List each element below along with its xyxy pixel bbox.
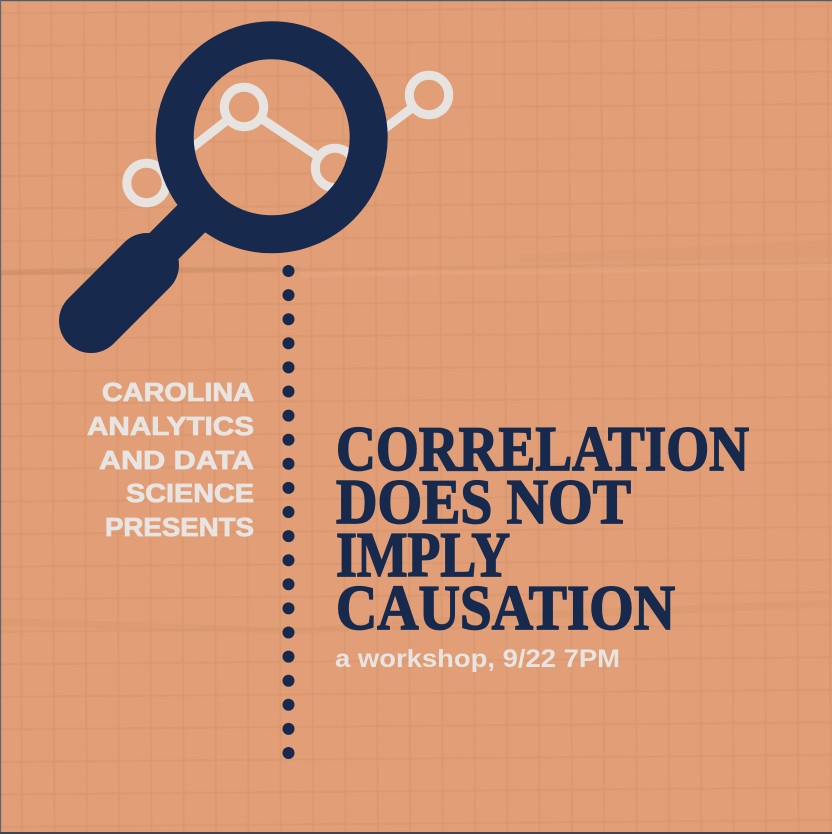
icon: magnifying glass: [91, 40, 369, 321]
line chart icon: [127, 75, 449, 203]
presenter text block: SCIENCE: [126, 478, 254, 508]
presenter text block: PRESENTS: [105, 512, 254, 542]
title: DOES NOT: [336, 466, 631, 537]
title: [336, 413, 749, 643]
presenter text block: CAROLINA: [102, 377, 254, 407]
title: CAUSATION: [336, 572, 675, 643]
presenter text block: [87, 377, 254, 542]
title: CORRELATION: [336, 413, 749, 484]
title: IMPLY: [336, 519, 510, 590]
presenter text block: ANALYTICS: [87, 411, 254, 441]
workshop date subtitle: a workshop, 9/22 7PM: [335, 645, 620, 673]
dotted vertical divider: [282, 265, 294, 759]
presenter text block: AND DATA: [99, 445, 254, 475]
